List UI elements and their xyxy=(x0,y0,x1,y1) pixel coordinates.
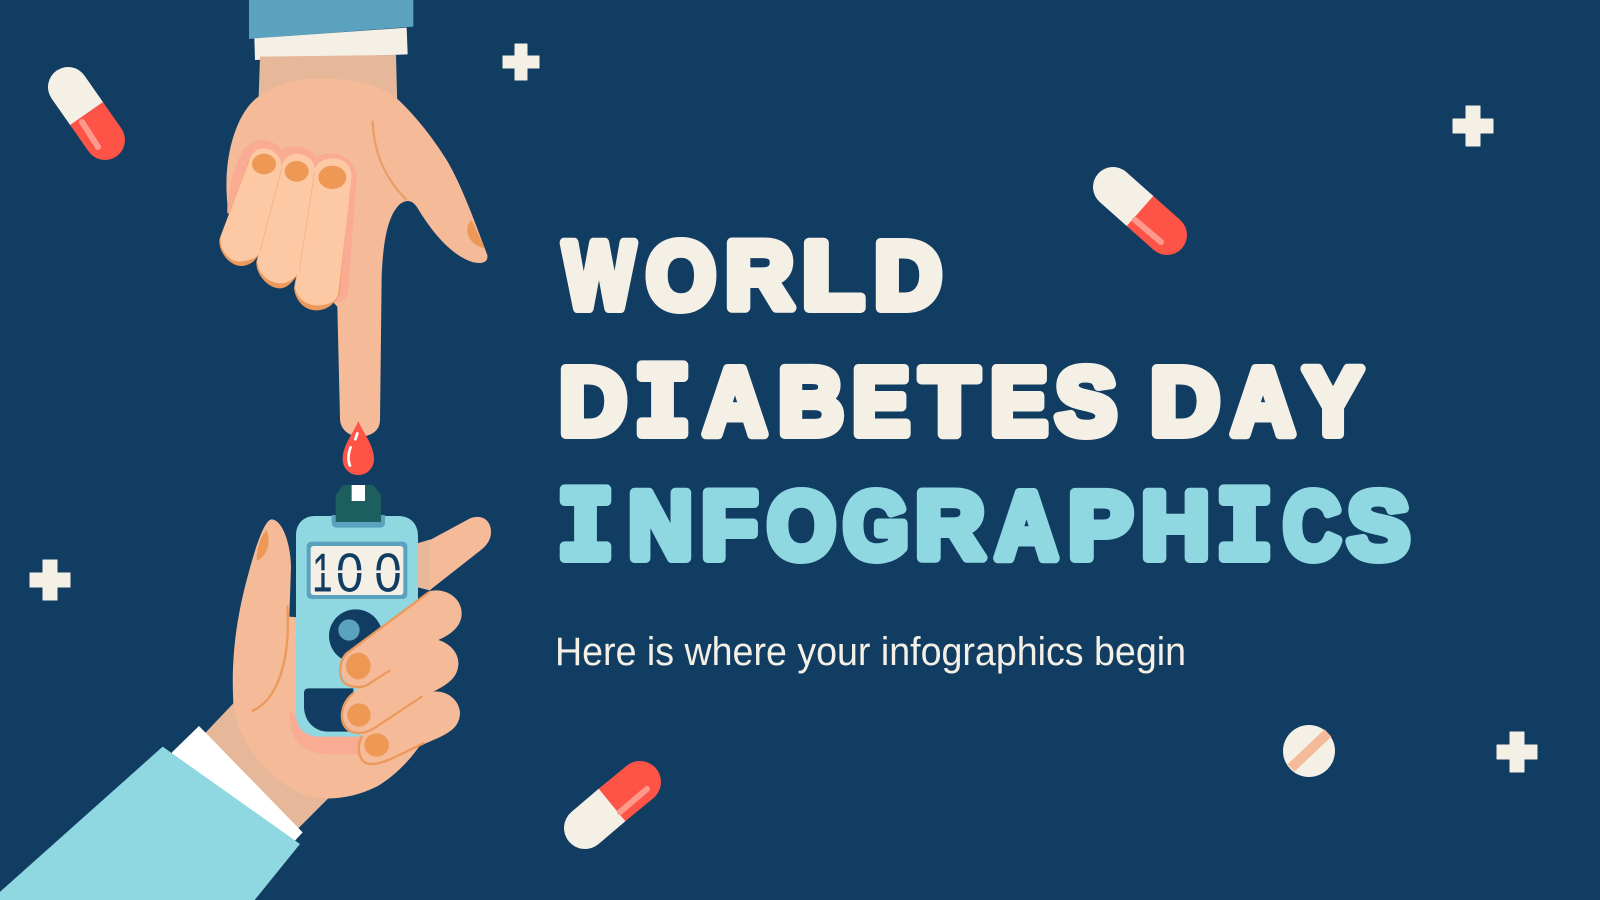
wrist xyxy=(203,702,330,830)
title line: DIABETES DAY: D xyxy=(1150,349,1220,455)
white shirt cuff xyxy=(167,726,303,847)
finger shadow xyxy=(227,140,357,302)
illustration: hand pointing down with blood drop xyxy=(219,0,487,475)
title line: INFOGRAPHICS: R xyxy=(916,473,984,579)
screen xyxy=(311,546,403,595)
plus: top centre xyxy=(503,44,539,80)
glucose meter xyxy=(296,485,418,737)
title line: DIABETES DAY: B xyxy=(778,349,844,455)
title line: DIABETES DAY: D xyxy=(560,349,626,455)
pill: top right capsule xyxy=(1113,187,1187,255)
title line: DIABETES DAY: A xyxy=(1232,349,1294,455)
title line: INFOGRAPHICS: G xyxy=(844,473,908,579)
title line: WORLD: L xyxy=(802,223,864,329)
illustration: hand holding glucose meter xyxy=(0,485,491,900)
subtitle: Here is where your infographics begin xyxy=(555,630,1186,674)
thumb crease xyxy=(253,607,288,711)
reading: 0 xyxy=(374,541,402,603)
wrist xyxy=(258,55,397,107)
palm shadow under meter xyxy=(289,710,367,754)
title line: INFOGRAPHICS: S xyxy=(1348,473,1410,579)
reading: 0 xyxy=(336,541,363,603)
index finger xyxy=(430,517,491,590)
title line: DIABETES DAY: I xyxy=(634,348,691,466)
title line: INFOGRAPHICS: C xyxy=(1284,473,1340,579)
lower button xyxy=(304,688,353,732)
thumb crease xyxy=(373,121,407,200)
sleeve xyxy=(0,747,300,900)
strip port xyxy=(332,515,385,528)
title line: INFOGRAPHICS: H xyxy=(1142,473,1210,579)
dial xyxy=(329,609,382,663)
round pill tablet xyxy=(1283,725,1335,777)
title line: WORLD: D xyxy=(874,223,942,329)
finger outlines xyxy=(340,593,428,764)
title line: DIABETES DAY: Y xyxy=(1304,349,1362,455)
shadow accent xyxy=(332,217,347,302)
title line: WORLD: R xyxy=(726,223,794,329)
reading: 1 xyxy=(312,541,333,603)
screen frame xyxy=(307,542,407,599)
fingernails xyxy=(257,530,389,757)
curled fingers outline xyxy=(219,150,351,310)
thumb and palm xyxy=(233,519,423,798)
title line: INFOGRAPHICS: I xyxy=(1216,472,1273,590)
finger separators xyxy=(260,168,314,271)
title line: DIABETES DAY: S xyxy=(1056,349,1116,455)
title line: INFOGRAPHICS: A xyxy=(996,473,1058,579)
test strip xyxy=(352,485,365,501)
title line: WORLD: O xyxy=(646,223,716,329)
dial button xyxy=(338,619,360,641)
plus: bottom right xyxy=(1497,732,1537,772)
hand with index finger and thumb xyxy=(226,78,487,437)
fingernails xyxy=(252,154,485,248)
title line: DIABETES DAY: E xyxy=(990,349,1048,455)
title line: WORLD: W xyxy=(564,223,635,329)
title line: DIABETES DAY: A xyxy=(704,349,766,455)
plus: top right xyxy=(1453,106,1493,146)
title line: INFOGRAPHICS: N xyxy=(628,473,692,579)
title line: DIABETES DAY: T xyxy=(920,349,978,455)
title line: INFOGRAPHICS: P xyxy=(1068,473,1132,579)
title line: INFOGRAPHICS: I xyxy=(557,472,614,590)
shirt cuff xyxy=(254,28,408,60)
title line: DIABETES DAY: E xyxy=(852,349,910,455)
plus: left xyxy=(30,560,70,600)
title line: INFOGRAPHICS: O xyxy=(768,473,836,579)
index finger base xyxy=(415,539,431,591)
curled fingers xyxy=(220,148,352,305)
pill: top left capsule xyxy=(68,87,125,160)
strip holder xyxy=(336,485,381,522)
sleeve xyxy=(249,0,413,39)
pill: bottom capsule xyxy=(585,761,661,828)
meter body xyxy=(296,516,418,737)
gripping fingers xyxy=(342,590,462,765)
segment gaps xyxy=(317,570,400,573)
title line: INFOGRAPHICS: F xyxy=(702,473,758,579)
blood drop xyxy=(343,421,374,475)
